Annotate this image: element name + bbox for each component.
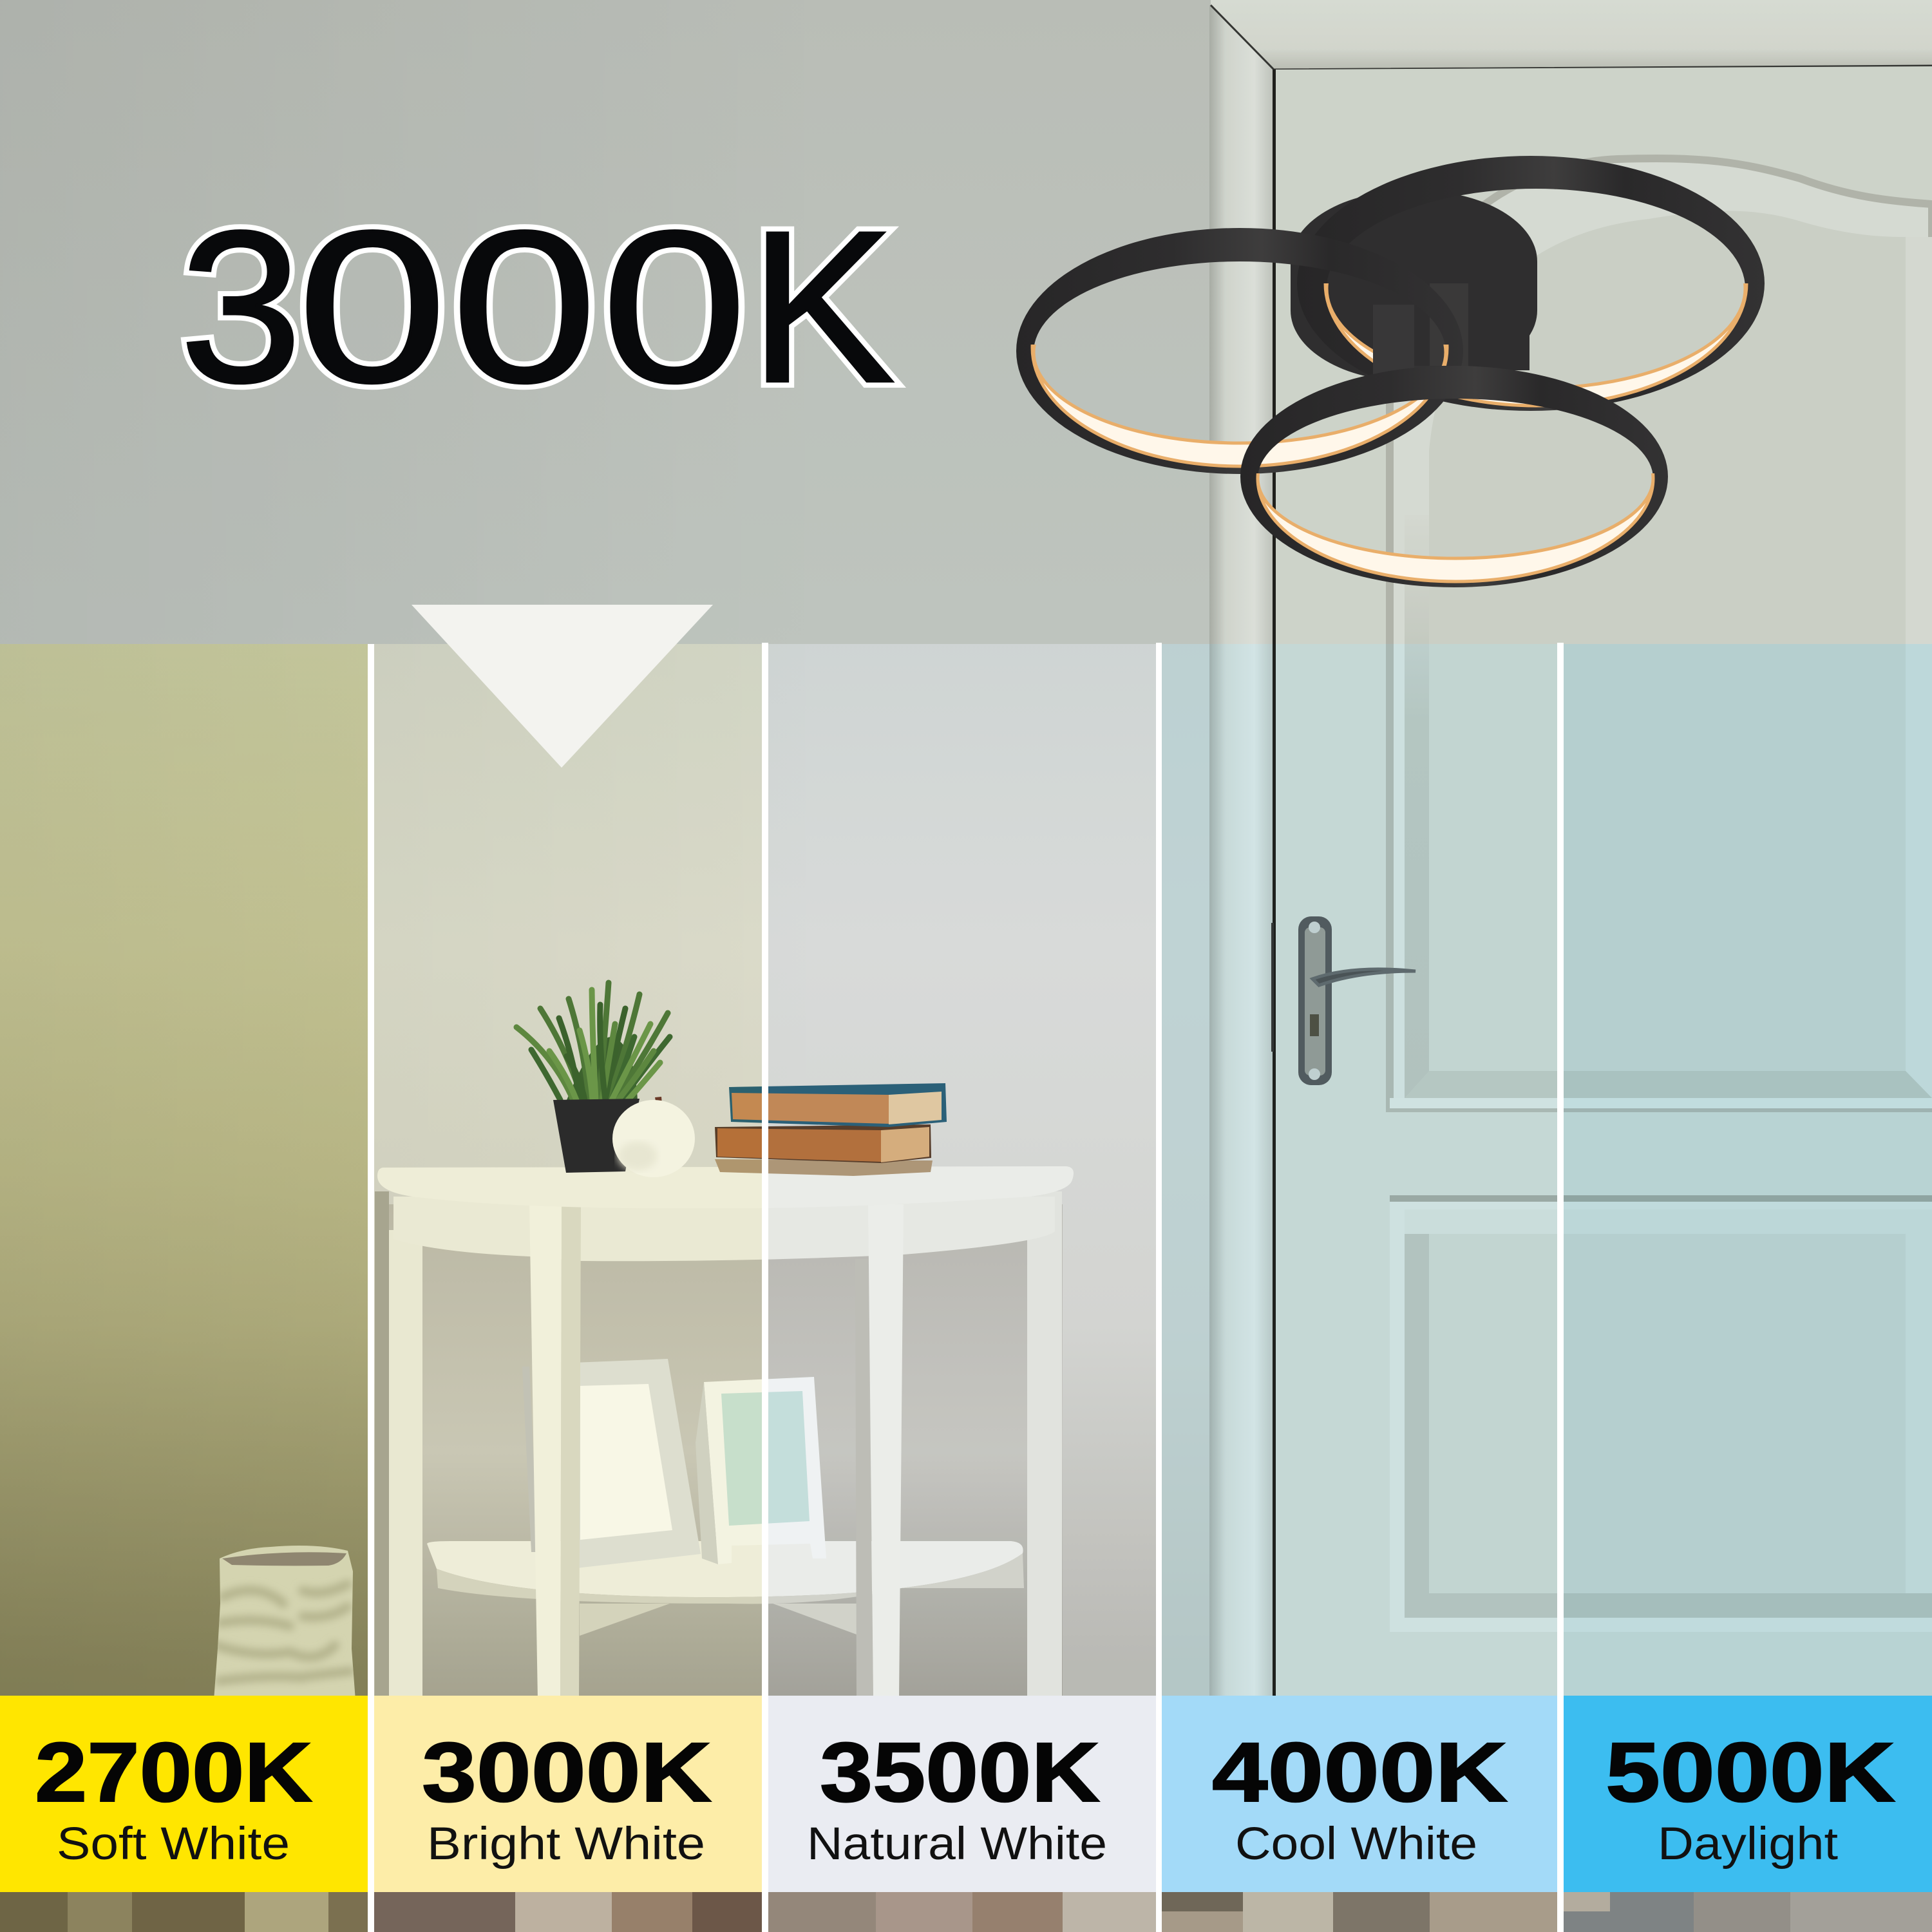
title: 3000K: 3 <box>180 186 302 427</box>
door <box>1271 66 1932 1700</box>
top band shade <box>0 0 1932 644</box>
title: 3000K: K <box>750 186 895 427</box>
divider 4 <box>1557 643 1564 1932</box>
title: 3000K: 0 <box>601 186 747 427</box>
lamp centre block <box>1378 283 1530 370</box>
panel: 3500K label <box>768 1696 1156 1892</box>
panel: 2700K label <box>0 1696 368 1892</box>
tint: 3000K panel <box>374 644 762 1700</box>
title: 3000K: 0 <box>451 186 597 427</box>
table <box>375 1166 1074 1700</box>
table back legs <box>389 1191 1062 1700</box>
table front legs <box>529 1204 904 1700</box>
divider 2 <box>762 643 768 1932</box>
panel: 2700K label: 2700K <box>35 1725 312 1819</box>
panel: 3000K label <box>374 1696 762 1892</box>
title: 3000K: 0 <box>298 186 447 427</box>
table shelf <box>427 1541 1024 1636</box>
door handle <box>1271 916 1416 1085</box>
title: 3000K: 0 <box>601 186 747 427</box>
door lower panel <box>1390 1195 1932 1632</box>
panel: 4000K label: Cool White <box>1235 1819 1477 1870</box>
title: 3000K: 3 <box>180 186 302 427</box>
panel: 5000K label: 5000K <box>1605 1725 1895 1819</box>
lamp arm <box>1373 305 1459 393</box>
books <box>715 1083 947 1176</box>
panel: 4000K label: 4000K <box>1212 1725 1508 1819</box>
frame: white picture frame <box>696 1377 826 1564</box>
lamp left ring <box>1016 228 1463 474</box>
apple ornament <box>612 1097 695 1177</box>
arrow: selected temperature marker <box>412 605 713 768</box>
tint: 3500K panel <box>768 644 1156 1700</box>
plant <box>516 983 670 1100</box>
panel: 5000K label: Daylight <box>1658 1819 1838 1870</box>
panel: 5000K label <box>1564 1696 1932 1892</box>
wall strip left of door <box>1162 644 1209 1700</box>
panel: 3500K label: Natural White <box>807 1819 1107 1870</box>
tint: 2700K panel <box>0 644 368 1700</box>
divider 3 <box>1156 643 1162 1932</box>
panel: 3000K label: 3000K <box>422 1725 712 1819</box>
lamp front ring <box>1240 366 1668 587</box>
title: 3000K: 0 <box>298 186 447 427</box>
divider 1 <box>368 644 374 1932</box>
ceiling lamp <box>1016 156 1765 587</box>
lamp mount <box>1291 191 1537 381</box>
panel: 3000K label: Bright White <box>427 1819 705 1870</box>
vase <box>214 1546 355 1700</box>
frame: silver picture frame <box>522 1359 701 1568</box>
lamp back ring <box>1297 156 1765 411</box>
floor planks <box>0 1892 1932 1932</box>
door upper panel <box>1390 158 1932 1108</box>
tint: 4000K panel <box>1162 644 1557 1700</box>
panel: 3500K label: 3500K <box>820 1725 1100 1819</box>
panel: 2700K label: Soft White <box>57 1819 290 1870</box>
table apron <box>393 1197 1055 1261</box>
title: 3000K: 0 <box>451 186 597 427</box>
flower pot <box>553 1099 639 1173</box>
tint: 5000K panel <box>1564 644 1932 1700</box>
door casing <box>1209 0 1932 1700</box>
table top <box>377 1166 1074 1208</box>
title: 3000K <box>180 186 895 427</box>
title: 3000K: K <box>750 186 895 427</box>
panel: 4000K label <box>1162 1696 1557 1892</box>
